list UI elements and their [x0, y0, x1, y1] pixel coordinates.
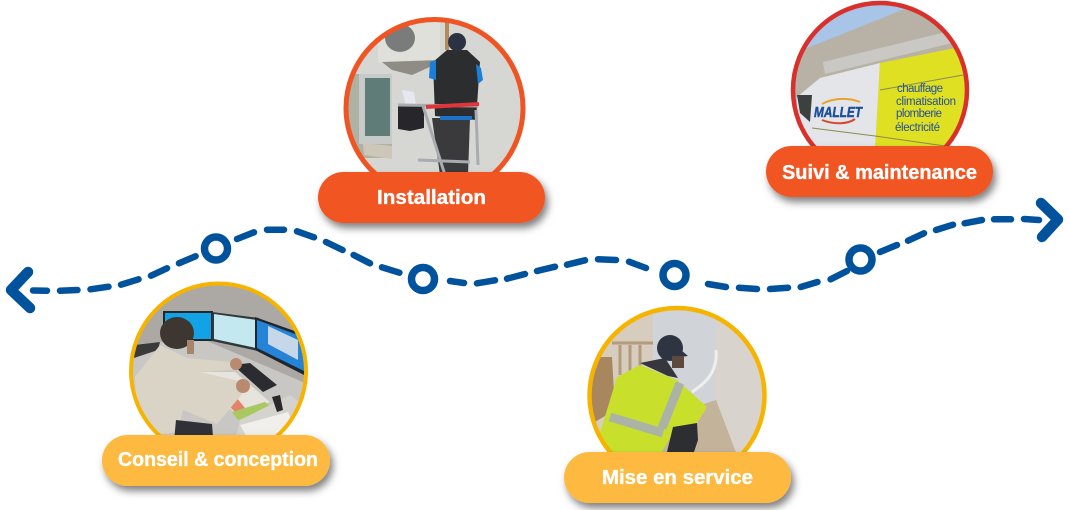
photo: technician installing outdoor unit	[348, 22, 520, 172]
step: Conseil & conception	[102, 282, 330, 486]
step: Mise en service	[564, 305, 791, 503]
step: Suivi & maintenance	[766, 0, 993, 197]
label pill	[766, 146, 993, 197]
photo: company van: électricité	[895, 122, 940, 134]
photo: company van: climatisation	[896, 96, 956, 108]
label pill: Suivi & maintenance	[782, 162, 977, 184]
photo: company van	[795, 5, 965, 146]
photo: technician commissioning water heater	[592, 310, 762, 452]
timeline node 1	[204, 237, 228, 260]
timeline node 4	[849, 248, 872, 271]
photo ring	[346, 20, 523, 196]
dashed timeline path	[33, 219, 1039, 291]
photo: designer at computer screens	[133, 286, 304, 435]
label pill: Installation	[377, 187, 486, 209]
photo ring	[793, 3, 967, 177]
label pill	[318, 172, 545, 223]
photo: company van: plomberie	[896, 108, 942, 120]
photo: company van: MALLET	[814, 104, 863, 121]
timeline node 3	[663, 264, 686, 286]
arrow: right end	[1041, 203, 1058, 237]
photo ring	[131, 284, 306, 458]
timeline node 2	[412, 268, 434, 290]
label pill	[102, 435, 330, 486]
label pill: Conseil & conception	[118, 449, 318, 471]
label pill	[564, 452, 791, 503]
arrow: left end	[11, 272, 30, 308]
label pill: Mise en service	[602, 467, 753, 489]
step: Installation	[318, 18, 545, 223]
photo: company van: chauffage	[897, 83, 943, 95]
photo ring	[590, 308, 764, 483]
